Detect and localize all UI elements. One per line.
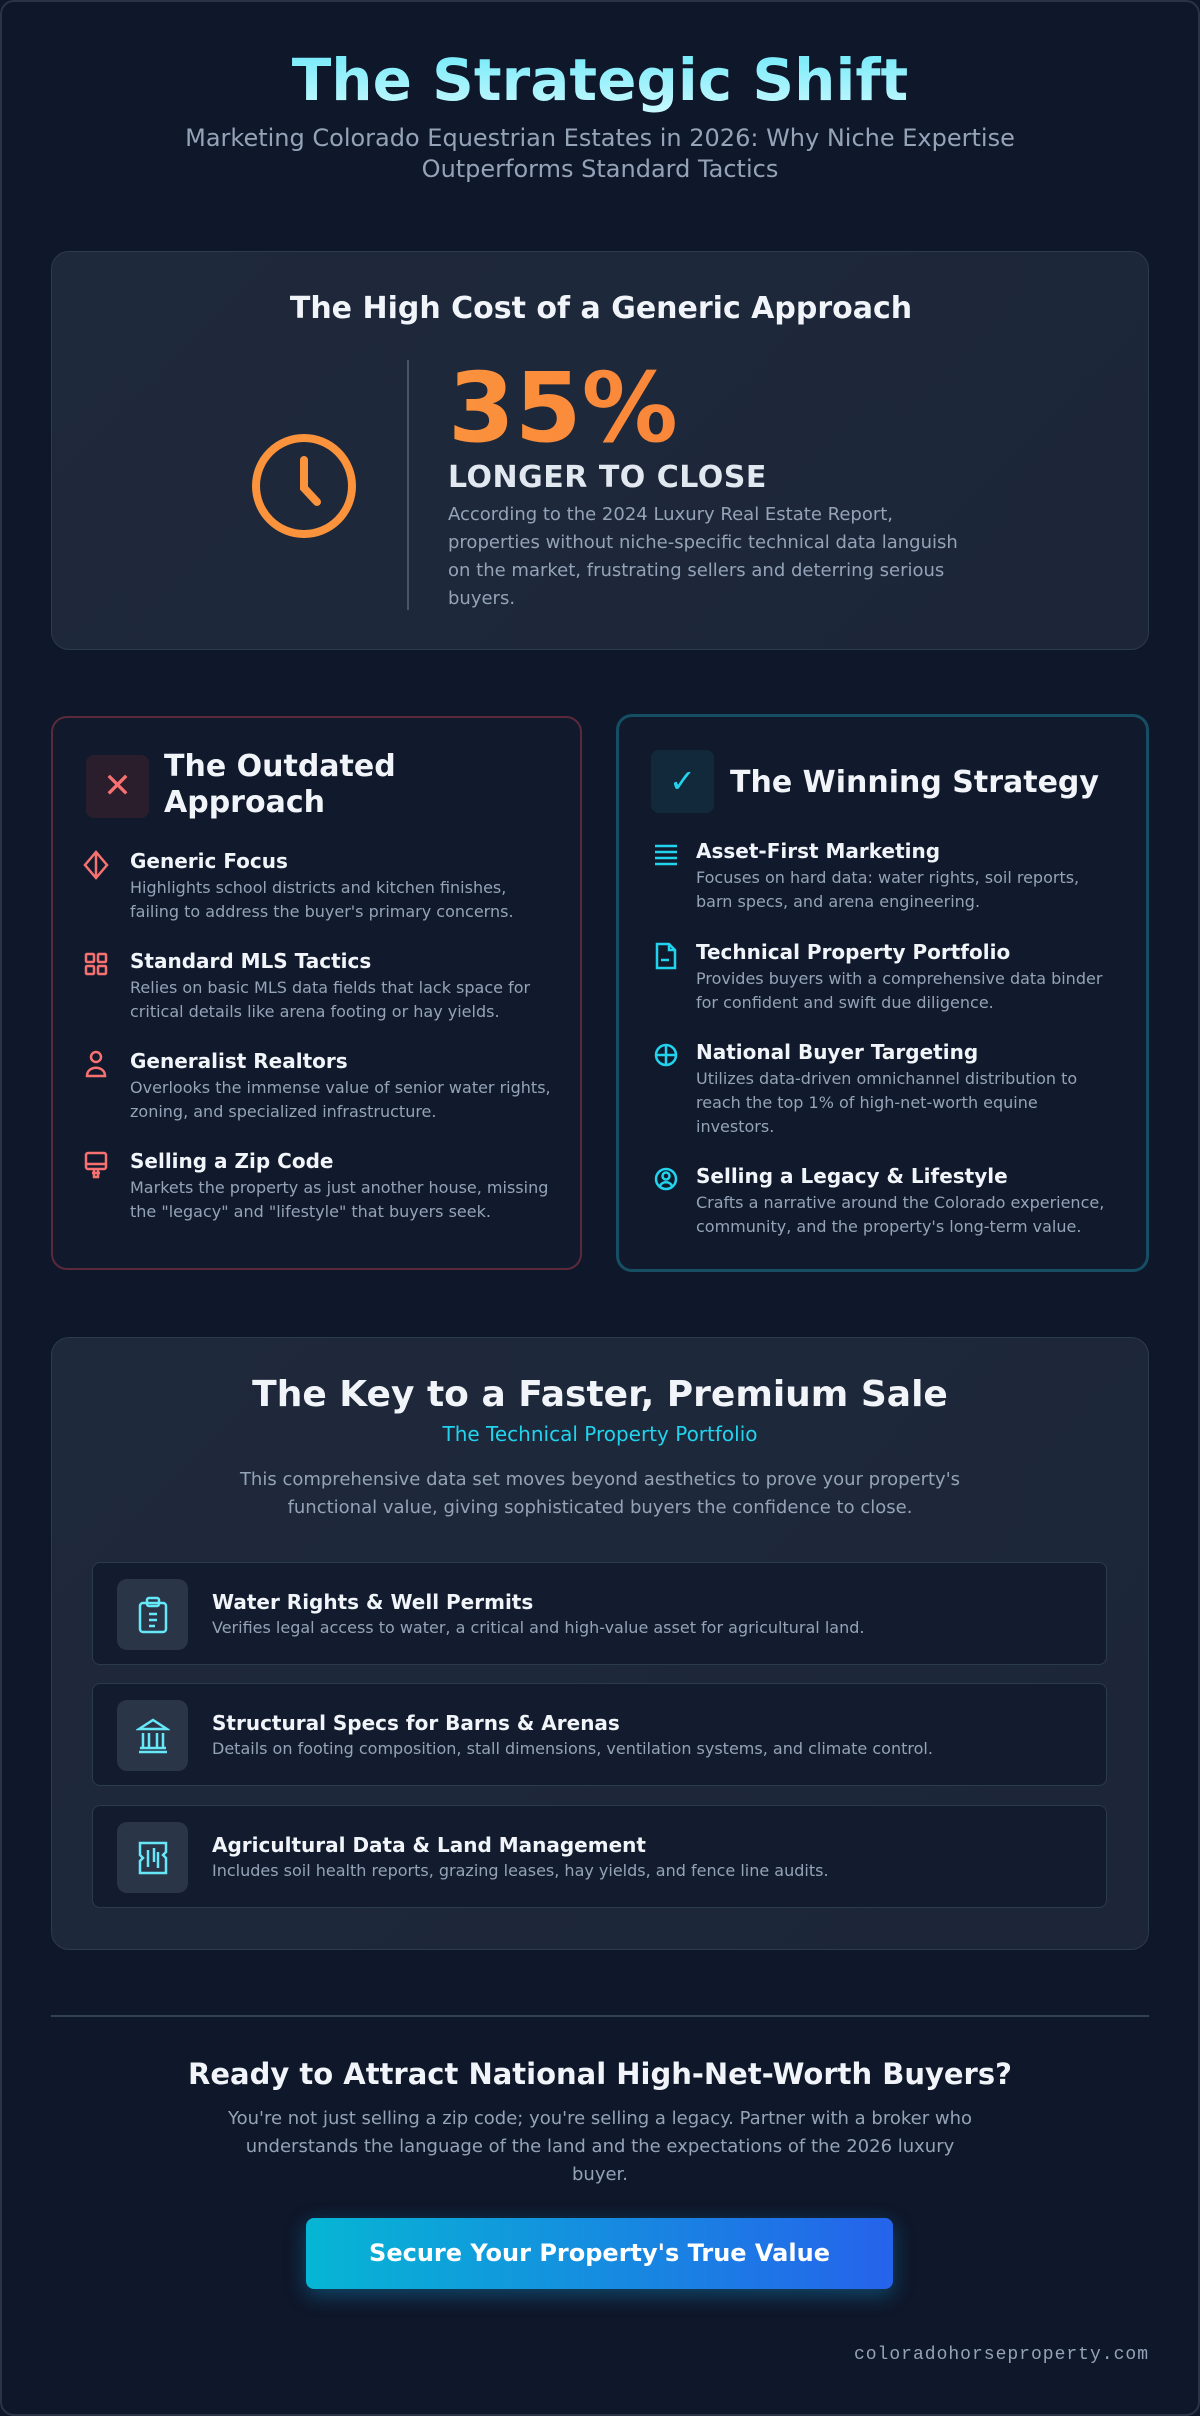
item: zip code: Selling a Zip Code (130, 1149, 333, 1173)
stat: According to the 2024 Luxury Real Estate Report, properties without niche-specific technical data languish on the market, frustrating sellers and deterring serious buyers. (448, 504, 958, 609)
CTA heading: Ready to Attract National High-Net-Worth Buyers? (188, 2057, 1012, 2091)
item: portfolio: Provides buyers with a comprehensive data binder for confident and swift due diligence. (696, 969, 1102, 1012)
divider (51, 2015, 1149, 2017)
panel: key to faster sale (51, 1337, 1149, 1950)
item: national buyer: National Buyer Targeting (696, 1040, 978, 1064)
item: generic focus (83, 849, 514, 921)
item: portfolio (656, 940, 1102, 1012)
subtitle: Marketing Colorado Equestrian Estates in 2026: Why Niche Expertise Outperforms Standard Tactics (185, 124, 1015, 183)
heading: Approach (164, 785, 325, 820)
card: water rights: Water Rights & Well Permits (212, 1590, 533, 1614)
card: structural specs (92, 1683, 1107, 1786)
panel: high cost (51, 251, 1149, 650)
item: asset first: Focuses on hard data: water rights, soil reports, barn specs, and arena engineering. (696, 868, 1079, 911)
card: agricultural: Includes soil health reports, grazing leases, hay yields, and fence line audits. (212, 1861, 829, 1880)
heading (164, 749, 396, 820)
card: structural specs: Details on footing composition, stall dimensions, ventilation systems, and climate control. (212, 1739, 933, 1758)
item: generic focus: Generic Focus (130, 849, 288, 873)
item: zip code (84, 1149, 548, 1221)
card: structural specs: Structural Specs for Barns & Arenas (212, 1711, 620, 1735)
stat: 35% (448, 352, 678, 464)
card: water rights (92, 1562, 1107, 1665)
item: legacy: Selling a Legacy & Lifestyle (696, 1164, 1008, 1188)
divider (407, 360, 409, 610)
title (0, 42, 1200, 118)
item: asset first: Asset-First Marketing (696, 839, 940, 863)
item: MLS: Standard MLS Tactics (130, 949, 371, 973)
card: agricultural: Agricultural Data & Land Management (212, 1833, 646, 1857)
item: asset first (655, 839, 1079, 911)
CTA button (306, 2218, 893, 2289)
icon: check (651, 750, 714, 813)
icon: map (117, 1822, 188, 1893)
icon: x (86, 755, 149, 818)
icon: clock (252, 434, 356, 538)
CTA button: Secure Your Property's True Value (369, 2239, 830, 2267)
card: water rights: Verifies legal access to water, a critical and high-value asset for agricultural land. (212, 1618, 864, 1637)
title: The Strategic Shift (292, 46, 908, 114)
card: agricultural (92, 1805, 1107, 1908)
item: generalist (86, 1049, 551, 1121)
item: national buyer: Utilizes data-driven omnichannel distribution to reach the top 1% of high-net-worth equine investors. (696, 1069, 1077, 1136)
section subheading: The Technical Property Portfolio (442, 1422, 758, 1446)
item: legacy (654, 1164, 1104, 1236)
panel: outdated approach (51, 716, 582, 1270)
item: MLS: Relies on basic MLS data fields that lack space for critical details like arena footing or hay yields. (130, 978, 530, 1021)
icon: building (117, 1700, 188, 1771)
item: generalist: Generalist Realtors (130, 1049, 348, 1073)
item: generalist: Overlooks the immense value of senior water rights, zoning, and specialized infrastructure. (130, 1078, 551, 1121)
heading: The Winning Strategy (730, 765, 1099, 800)
item: generic focus: Highlights school districts and kitchen finishes, failing to address the buyer's primary concerns. (130, 878, 514, 921)
panel: winning strategy (616, 714, 1149, 1272)
stat: LONGER TO CLOSE (448, 460, 767, 495)
section heading: The Key to a Faster, Premium Sale (252, 1374, 948, 1415)
footer url: coloradohorseproperty.com (854, 2345, 1149, 2365)
heading: The Outdated (164, 749, 396, 784)
icon: clipboard (117, 1579, 188, 1650)
section description: This comprehensive data set moves beyond aesthetics to prove your property's functional value, giving sophisticated buyers the confidence to close. (240, 1469, 960, 1518)
CTA text: You're not just selling a zip code; you're selling a legacy. Partner with a broker who understands the language of the land and the expectations of the 2026 luxury buyer. (228, 2108, 972, 2185)
item: MLS (84, 949, 530, 1021)
item: legacy: Crafts a narrative around the Colorado experience, community, and the property's long-term value. (696, 1193, 1104, 1236)
panel heading: The High Cost of a Generic Approach (290, 291, 912, 326)
icon: check: ✓ (669, 762, 696, 800)
item: national buyer (654, 1040, 1077, 1136)
stat (448, 352, 958, 609)
item: portfolio: Technical Property Portfolio (696, 940, 1010, 964)
icon: x: ✕ (103, 766, 132, 806)
item: zip code: Markets the property as just another house, missing the "legacy" and "lifestyle" that buyers seek. (130, 1178, 548, 1221)
